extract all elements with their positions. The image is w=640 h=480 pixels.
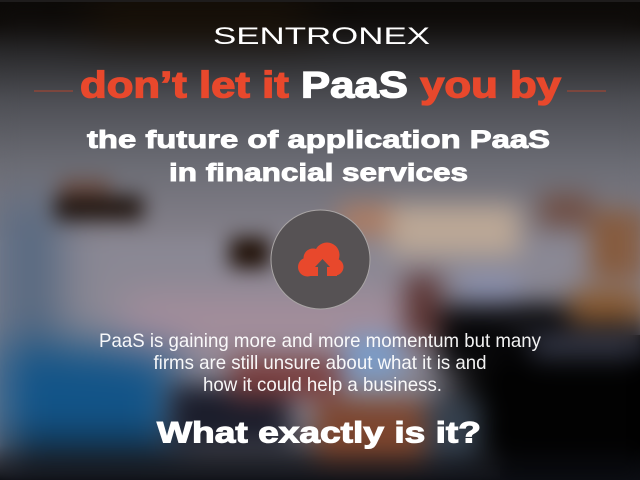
- upload arrow: [315, 259, 330, 276]
- icon: cloud upload in circle: [271, 210, 370, 309]
- body text: PaaS is gaining more and more momentum but many: [99, 330, 541, 352]
- logo: SENTRONEX: SENTRONEX: [213, 23, 430, 50]
- subtitle: the future of application PaaS: [87, 126, 550, 154]
- headline rule right: [567, 90, 606, 92]
- body text: how it could help a business.: [203, 374, 442, 396]
- headline rule left: [34, 90, 73, 92]
- cloud: [298, 242, 344, 276]
- body text: firms are still unsure about what it is and: [154, 352, 486, 374]
- subtitle: [87, 126, 550, 187]
- subtitle: in financial services: [169, 159, 468, 187]
- headline: don’t let it PaaS you by: [80, 64, 561, 106]
- closing question: What exactly is it?: [157, 416, 481, 450]
- body text: [99, 330, 541, 396]
